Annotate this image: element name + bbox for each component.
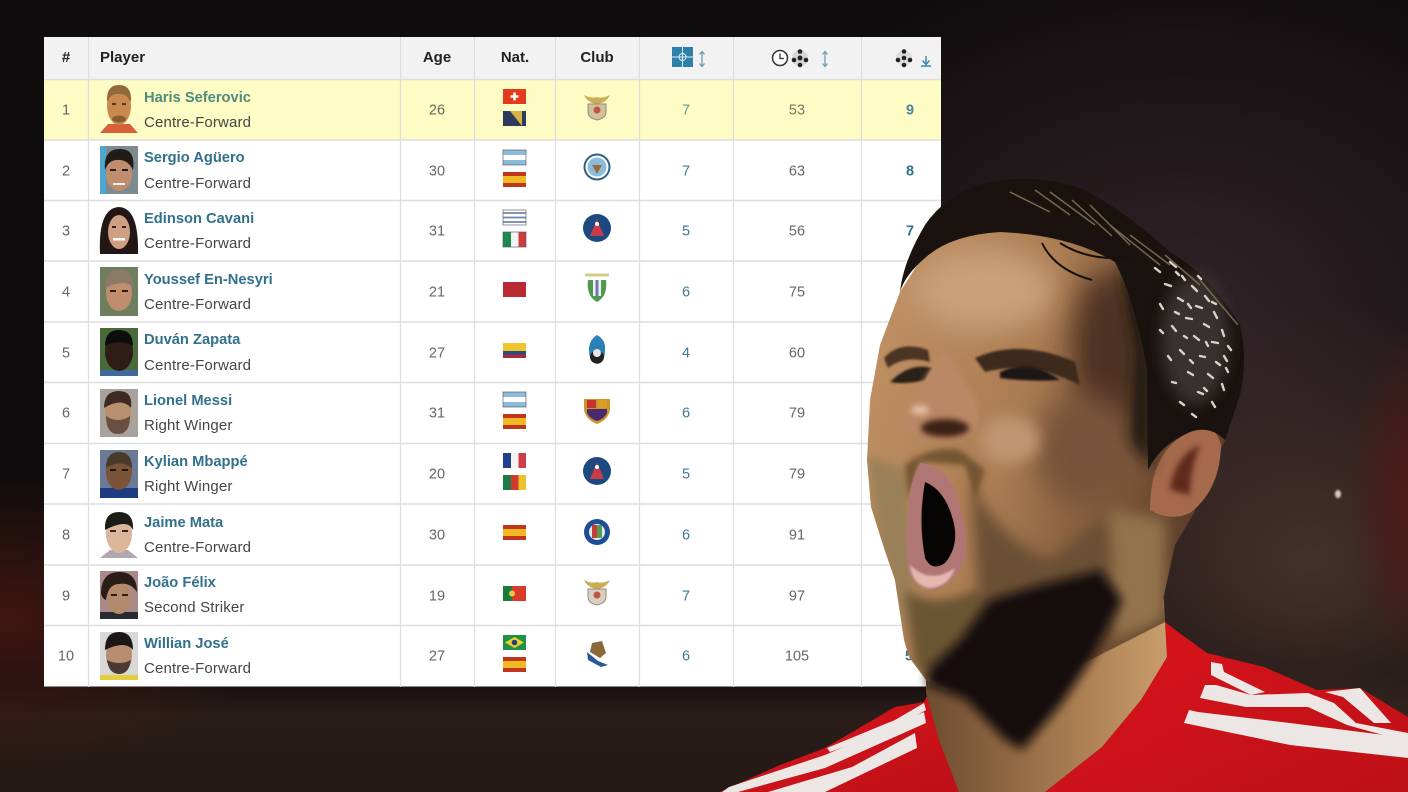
row 2: 30: [429, 164, 445, 180]
neck: [926, 590, 1167, 792]
club: Getafe: [584, 519, 610, 545]
row 10: 5: [905, 648, 913, 664]
row 5: 60: [789, 346, 805, 362]
row 3: 7: [906, 224, 914, 240]
portrait: Duvan Zapata: [100, 328, 138, 376]
row 1: 26: [429, 102, 445, 118]
row 7: 7: [62, 466, 70, 482]
portrait: Edinson Cavani: [100, 207, 138, 254]
row 5: 5: [62, 346, 70, 362]
row 2: 2: [62, 164, 70, 180]
portrait: Jaime Mata: [100, 512, 138, 558]
row 6: Right Winger: [144, 417, 232, 434]
row 6: 6: [62, 406, 70, 422]
portrait: Lionel Messi: [100, 389, 138, 437]
row 2: [62, 146, 914, 194]
table: top scorers: [44, 37, 941, 687]
club: Benfica: [584, 580, 610, 605]
hair: [900, 176, 1244, 470]
club: Real Sociedad: [587, 641, 608, 667]
row 10: 6: [682, 648, 690, 664]
portrait: Joao Felix: [100, 571, 138, 619]
row 5: 4: [682, 346, 690, 362]
under-jaw shadow: [926, 570, 1122, 750]
table header row: Age: [423, 49, 451, 66]
row 9: 97: [789, 588, 805, 604]
row 1: 9: [906, 102, 914, 118]
table header row: Player: [100, 49, 145, 66]
row 5: [62, 328, 805, 376]
row 3: 56: [789, 224, 805, 240]
club: PSG: [583, 457, 611, 485]
temple fade into hair: [1118, 262, 1152, 470]
row 3: 31: [429, 224, 445, 240]
row 4: Youssef En-Nesyri: [144, 272, 273, 288]
row 1: [62, 85, 914, 133]
eye left: [890, 367, 932, 383]
table header row: #: [62, 49, 71, 66]
flags: Uruguay, Italy: [503, 210, 526, 247]
nose: [903, 350, 978, 440]
row 5: 27: [429, 346, 445, 362]
row 4: [62, 267, 805, 316]
row 7: 79: [789, 466, 805, 482]
row 4: 21: [429, 284, 445, 300]
row 1: 7: [682, 102, 690, 118]
portrait: Haris Seferovic: [100, 85, 138, 133]
row 4: 4: [62, 284, 70, 300]
row 2: 8: [906, 164, 914, 180]
club: Benfica: [584, 95, 610, 120]
row 8: 8: [62, 528, 70, 544]
row 10: Willian José: [144, 636, 229, 652]
row 4: 75: [789, 284, 805, 300]
highlighted first row: [44, 79, 941, 140]
row 6: 79: [789, 406, 805, 422]
row 9: 19: [429, 588, 445, 604]
row 8: 30: [429, 528, 445, 544]
club: Leganes: [585, 275, 609, 302]
flags: Switzerland, Bosnia: [503, 89, 526, 126]
row 7: Kylian Mbappé: [144, 454, 248, 470]
row 9: Second Striker: [144, 599, 244, 616]
row 1: 53: [789, 102, 805, 118]
row 8: 6: [682, 528, 690, 544]
row 1: Haris Seferovic: [144, 90, 251, 106]
row 8: Centre-Forward: [144, 539, 251, 556]
row 9: 9: [62, 588, 70, 604]
flag: Portugal: [503, 586, 526, 601]
red shirt: [720, 622, 1408, 792]
eyebrow right: [975, 349, 1080, 385]
row 9: 7: [682, 588, 690, 604]
row 3: 5: [682, 224, 690, 240]
row 10: Centre-Forward: [144, 660, 251, 677]
row 6: 31: [429, 406, 445, 422]
row 3: Edinson Cavani: [144, 211, 254, 227]
player photo: Haris Seferovic shouting: [720, 176, 1408, 792]
open mouth: [906, 463, 966, 590]
row 4: Centre-Forward: [144, 296, 251, 313]
club: Barcelona: [584, 399, 610, 424]
row 6: 6: [682, 406, 690, 422]
row 8: [62, 512, 805, 558]
club: PSG: [583, 214, 611, 242]
row 3: [62, 207, 914, 254]
row 2: 63: [789, 164, 805, 180]
flags: Argentina, Spain: [503, 150, 526, 187]
row 10: [58, 632, 913, 680]
row 3: 3: [62, 224, 70, 240]
club: Atalanta: [589, 335, 605, 364]
row 1: Centre-Forward: [144, 114, 251, 131]
portrait: Willian Jose: [100, 632, 138, 680]
row 10: 27: [429, 648, 445, 664]
flag: Morocco: [503, 282, 526, 297]
eyebrow left: [884, 346, 930, 368]
row 5: Duván Zapata: [144, 332, 241, 348]
row 8: 91: [789, 528, 805, 544]
ear: [1150, 428, 1221, 517]
table header row: Nat.: [501, 49, 529, 66]
row 9: [62, 571, 805, 619]
row 7: 20: [429, 466, 445, 482]
light speck in background: [1335, 490, 1341, 498]
row 6: [62, 389, 805, 437]
row 2: Sergio Agüero: [144, 150, 245, 166]
row 10: 105: [785, 648, 809, 664]
row 10: 10: [58, 648, 74, 664]
portrait: Kylian Mbappe: [100, 450, 138, 498]
flags: Argentina, Spain: [503, 392, 526, 429]
row 7: 5: [682, 466, 690, 482]
row 5: Centre-Forward: [144, 357, 251, 374]
flag: Colombia: [503, 343, 526, 358]
row 7: Right Winger: [144, 478, 232, 495]
row 2: Centre-Forward: [144, 175, 251, 192]
row 1: 1: [62, 102, 70, 118]
club: Manchester City: [584, 154, 610, 180]
row 6: Lionel Messi: [144, 393, 232, 409]
flag: Spain: [503, 525, 526, 540]
row 7: [62, 450, 805, 498]
row 3: Centre-Forward: [144, 235, 251, 252]
portrait: Sergio Aguero: [100, 146, 138, 194]
row 2: 7: [682, 164, 690, 180]
head skin: [867, 225, 1225, 690]
flags: France, Cameroon: [503, 453, 526, 490]
row 4: 6: [682, 284, 690, 300]
shirt stripes: [722, 662, 1408, 792]
face shading: [867, 250, 1165, 690]
table header row: [44, 37, 941, 79]
row 9: João Félix: [144, 575, 217, 591]
eye right: [1000, 367, 1060, 381]
table header row: Club: [580, 49, 614, 66]
flags: Brazil, Spain: [503, 635, 526, 672]
row 8: Jaime Mata: [144, 515, 224, 531]
portrait: Youssef En-Nesyri: [100, 267, 138, 316]
